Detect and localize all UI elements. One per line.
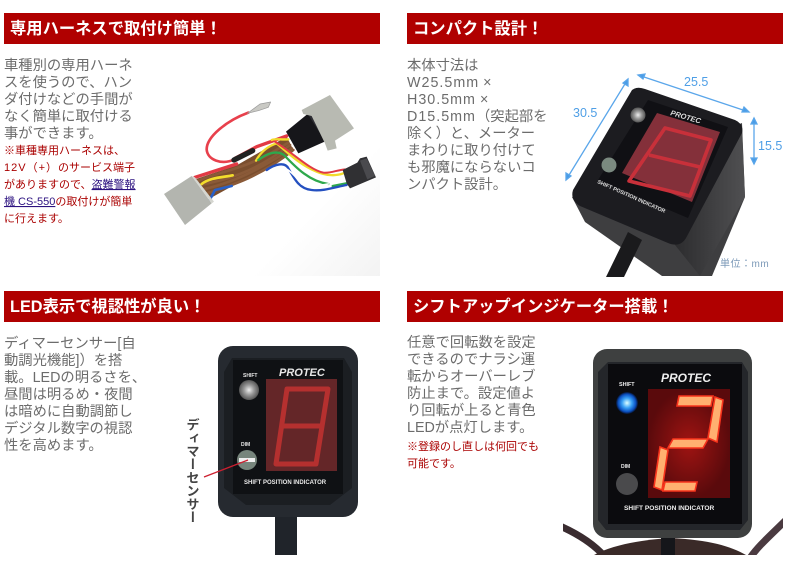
text block: LED description: は暗めに自動調節し (4, 403, 133, 420)
text block: compact description: H30.5mm × (407, 92, 488, 108)
note: harness service terminal: がありますので、盗難警報 (4, 177, 136, 191)
text: device labels: SHIFT POSITION INDICATOR (596, 179, 666, 215)
text: device labels (619, 371, 714, 512)
text block: shift-up description: できるのでナラシ運 (407, 351, 535, 368)
text block: harness description: 事ができます。 (4, 125, 103, 142)
text: device labels: SHIFT POSITION INDICATOR (624, 505, 714, 512)
heading: compact: コンパクト設計！ (413, 20, 543, 38)
panel: dedicated harness (4, 13, 380, 276)
heading: LED (4, 291, 380, 322)
text block: compact description: 除く）と、メーター (407, 125, 535, 142)
text: device labels: PROTEC (279, 367, 326, 379)
text: device labels: PROTEC (661, 371, 711, 385)
panel: shift-up indicator (407, 291, 786, 558)
text: device labels: SHIFT (243, 373, 257, 379)
dimension labels: 25.5 (684, 75, 708, 89)
note: re-registration: 可能です。 (407, 456, 461, 470)
text block: LED description: 載。LEDの明るさを、 (4, 369, 146, 386)
text block: shift-up description: り回転が上ると青色 (407, 402, 536, 419)
text block: LED description: 性を高めます。 (4, 437, 103, 454)
heading: harness: 専用ハーネスで取付け簡単！ (10, 19, 222, 38)
text: device labels: DIM (241, 442, 250, 448)
text block: harness description: なく簡単に取付ける (4, 108, 133, 125)
text block: compact description: D15.5mm（突起部を (407, 108, 547, 125)
photo: device lit (560, 349, 786, 558)
heading: shift-up: シフトアップインジケーター搭載！ (413, 297, 674, 316)
heading: shift-up (407, 291, 783, 322)
text block: compact description: ンパクト設計。 (407, 176, 507, 193)
photo: device front (218, 346, 358, 555)
photo: device with dimensions (572, 88, 745, 277)
note: harness service terminal (4, 143, 136, 225)
text block: compact description (407, 57, 547, 193)
note: harness service terminal: に行えます。 (4, 212, 69, 225)
text block: harness description: 車種別の専用ハーネ (4, 57, 133, 74)
callout: dimmer sensor: ディマーセンサー (184, 417, 200, 524)
heading: harness (4, 13, 380, 44)
panel: compact design (407, 13, 783, 277)
dimension labels: 30.5 (573, 106, 597, 120)
text block: shift-up description: 転からオーバーレブ (407, 367, 536, 385)
unit label: 単位：mm (720, 257, 769, 270)
text block: LED description (4, 334, 146, 454)
heading: compact (407, 13, 783, 44)
heading: LED: LED表示で視認性が良い！ (10, 297, 205, 316)
text block: harness description: ダ付けなどの手間が (4, 91, 133, 108)
text block: compact description: W25.5mm × (407, 75, 491, 91)
text block: compact description: も邪魔にならないコ (407, 159, 536, 176)
text block: harness description: スを使うので、ハン (4, 74, 132, 91)
note: harness service terminal: 機 CS-550の取付けが簡単 (4, 194, 132, 208)
text block: shift-up description: 防止まで。設定値よ (407, 385, 535, 402)
text block: compact description: 本体寸法は (407, 57, 478, 74)
dimension labels (573, 75, 782, 153)
photo: wiring harness (164, 55, 380, 276)
callout: dimmer sensor (184, 417, 248, 524)
text: device labels: PROTEC (669, 108, 703, 126)
text block: compact description: まわりに取り付けて (407, 142, 536, 159)
text block: shift-up description (407, 334, 536, 436)
text: device labels (241, 367, 327, 486)
text: device labels: SHIFT (619, 382, 635, 388)
note: harness service terminal: ※車種専用ハーネスは、 (4, 143, 125, 157)
text block: LED description: 昼間は明るめ・夜間 (4, 386, 133, 403)
panel: LED visibility (4, 291, 380, 555)
text block: harness description (4, 57, 133, 142)
text: device labels: DIM (621, 464, 630, 470)
text: device labels: SHIFT POSITION INDICATOR (244, 480, 327, 486)
text block: LED description: ディマーセンサー[自 (4, 334, 136, 352)
note: harness service terminal: 12V（+）のサービス端子 (4, 161, 135, 174)
note: re-registration (407, 439, 539, 470)
note: re-registration: ※登録のし直しは何回でも (407, 439, 539, 453)
text block: shift-up description: 任意で回転数を設定 (407, 334, 536, 351)
text block: LED description: 動調光機能]）を搭 (4, 351, 122, 369)
text block: shift-up description: LEDが点灯します。 (407, 419, 533, 436)
dimension labels: 15.5 (758, 139, 782, 153)
arrows: dimension lines (566, 74, 757, 180)
text block: LED description: デジタル数字の視認 (4, 419, 132, 437)
text: device labels (596, 108, 703, 215)
